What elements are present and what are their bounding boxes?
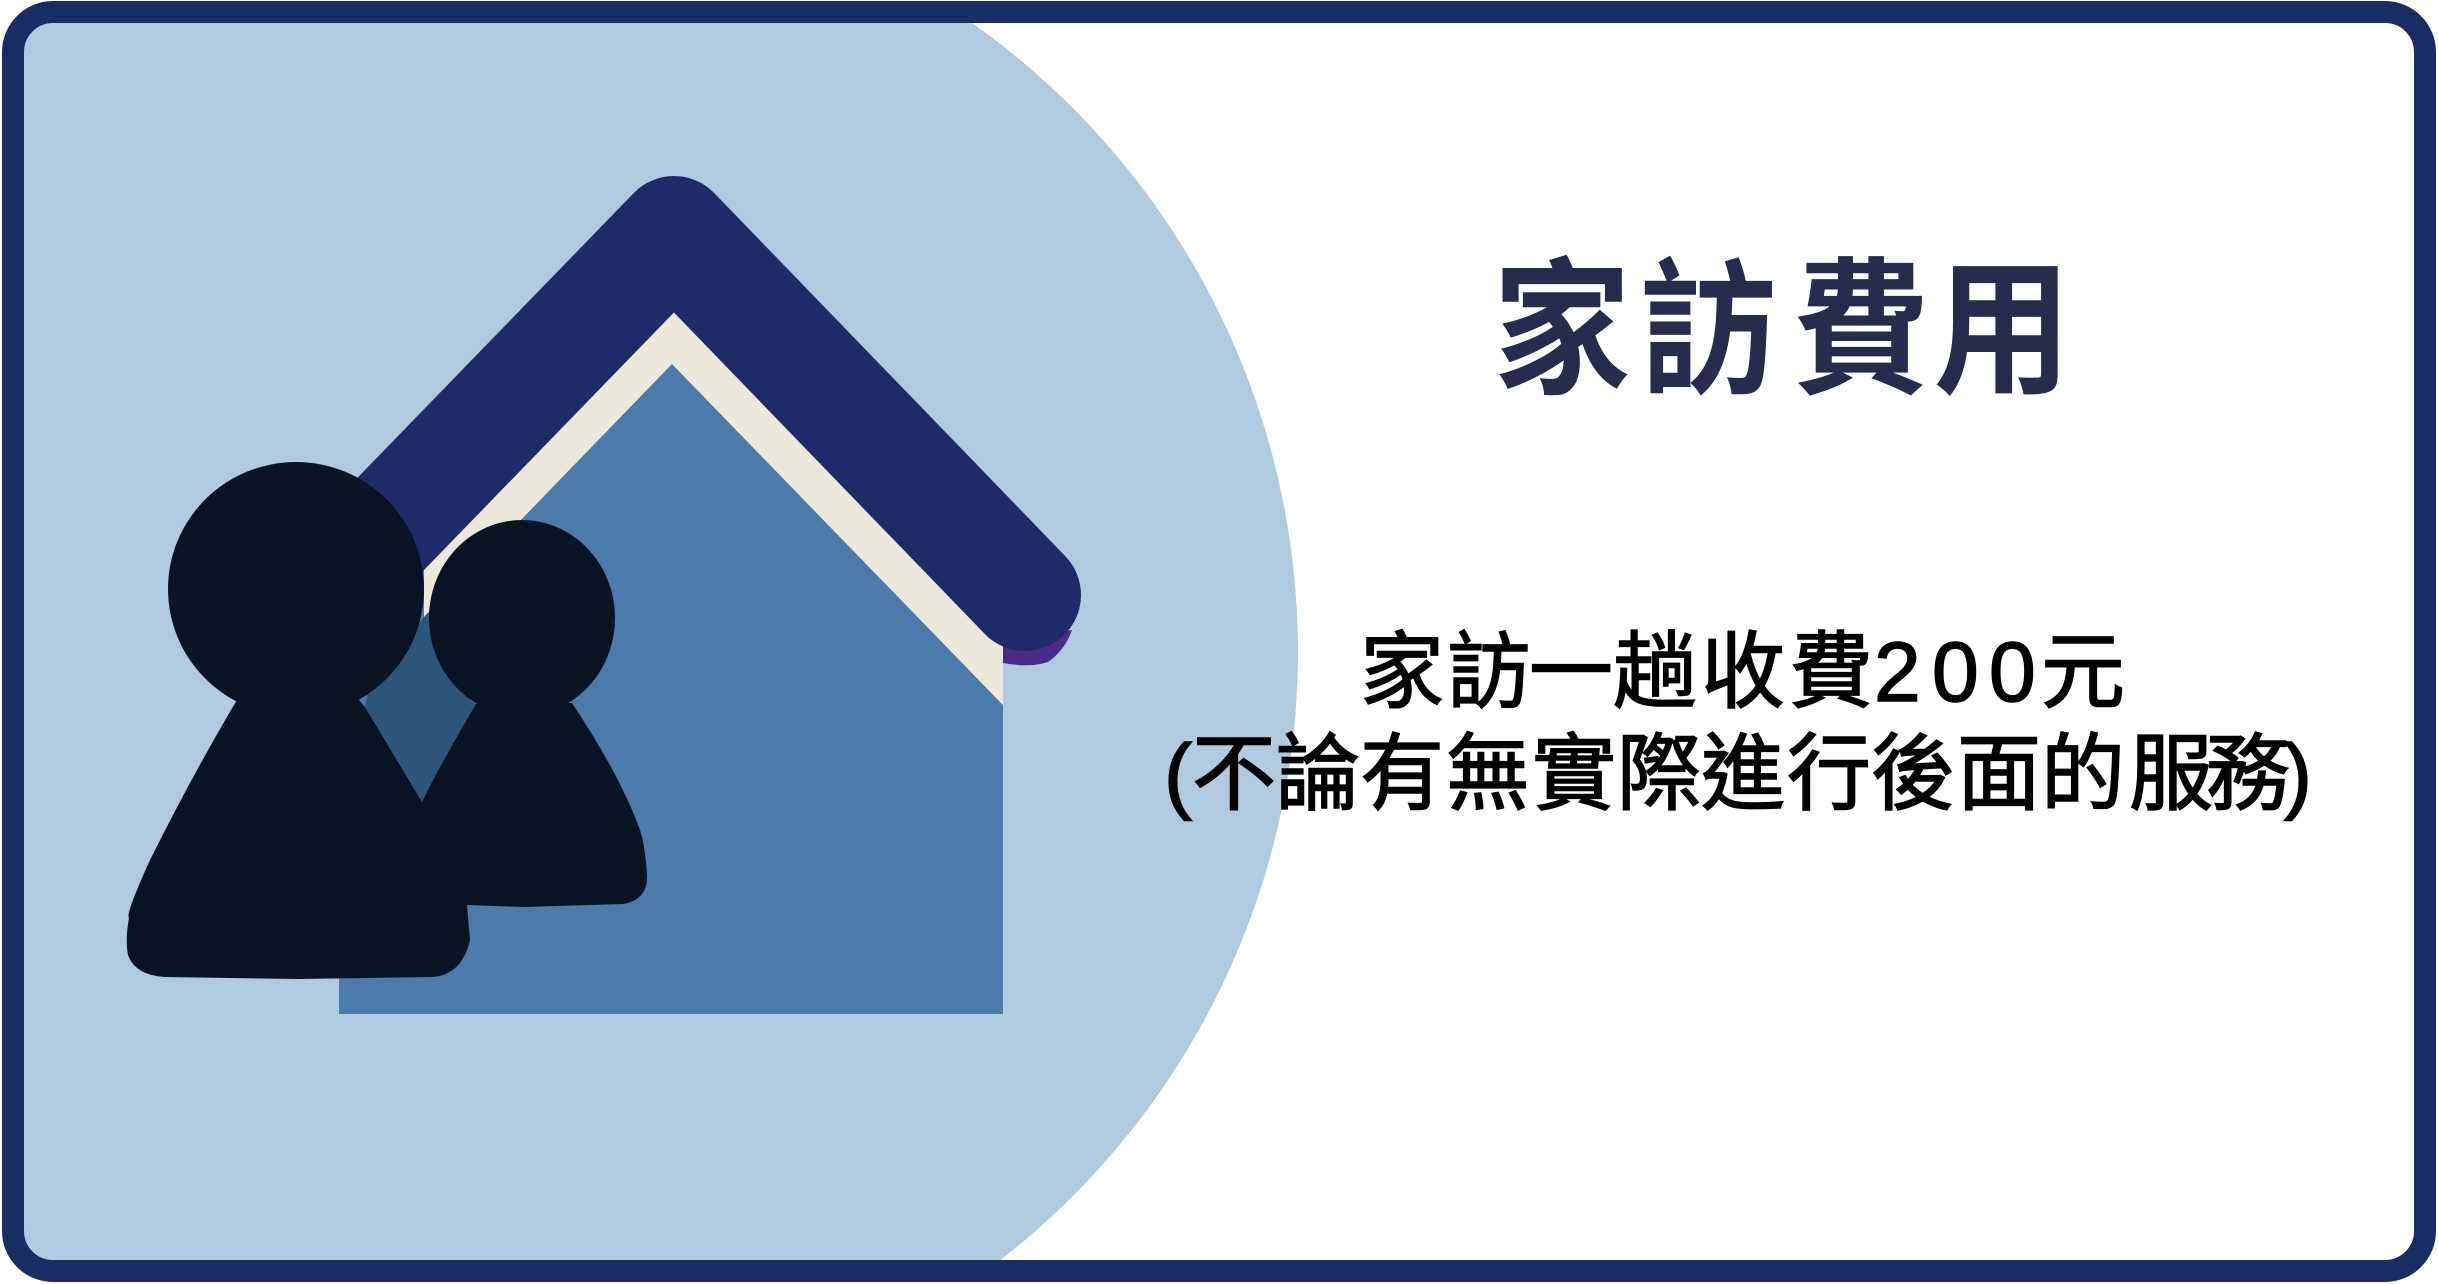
title: 家訪費用 [1493,249,2071,414]
house body [339,364,1003,1014]
icon: house with two people [127,232,1072,1014]
body [127,695,470,979]
shadow between people [365,600,476,802]
body [422,703,647,907]
person: small [422,520,647,907]
person: large [127,462,470,979]
head [429,520,615,716]
text block: fee note: (不論有無實際進行後面的服務) [1164,727,2312,821]
head [168,462,424,716]
house roof shadow [1003,630,1072,665]
cream roof band [424,312,1003,705]
text block: home visit fee: 家訪一趟收費200元 [1360,625,2125,719]
panel: light blue circle background [13,12,1298,1271]
roof [345,232,1025,595]
